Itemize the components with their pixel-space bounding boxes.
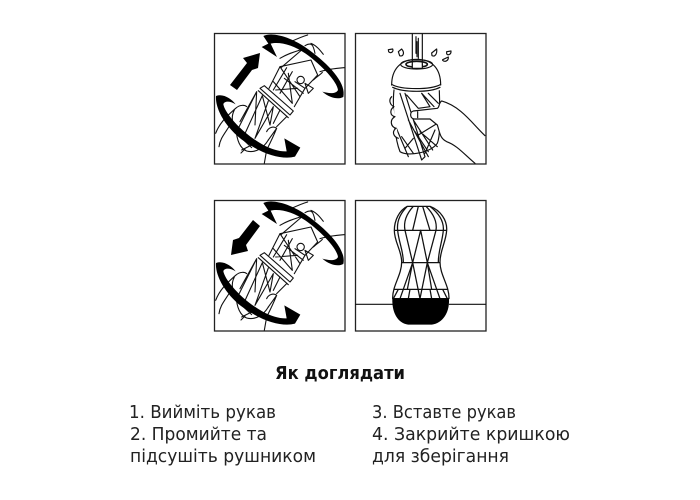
black cap: [392, 298, 449, 325]
text block: steps 3-4: 4. Закрийте кришкою: [372, 424, 570, 445]
water stream: [412, 34, 422, 66]
arrow: up-right: [230, 53, 260, 90]
text block: steps 3-4: 3. Вставте рукав: [372, 402, 516, 423]
panel: rinse under water: [356, 34, 486, 164]
text block: steps 3-4: [372, 402, 570, 467]
water drops: [388, 49, 451, 61]
left fingers: [390, 97, 398, 138]
text block: steps 1-2: підсушіть рушником: [130, 446, 316, 467]
cap: [392, 59, 441, 91]
title: Як доглядати: [275, 363, 405, 384]
panel: closed device with cap: [355, 200, 486, 331]
panel: twist and pull sleeve out: [214, 34, 345, 164]
hand: [411, 101, 485, 163]
panel: twist and push sleeve in: [214, 200, 345, 331]
sleeve cage: [393, 90, 440, 160]
text block: steps 1-2: 2. Промийте та: [130, 424, 267, 445]
arrow: down-left: [231, 220, 260, 255]
cage outline: [393, 206, 449, 299]
illustration: device under running water held by hand: [388, 34, 485, 163]
text block: steps 3-4: для зберігання: [372, 446, 509, 467]
illustration: hands twisting device with rotation arrows: [216, 34, 344, 163]
illustration: hands twisting device with rotation arrows: [216, 201, 344, 330]
text block: steps 1-2: 1. Вийміть рукав: [129, 402, 276, 423]
surface line: [355, 303, 486, 306]
text block: steps 1-2: [129, 402, 316, 467]
illustration: sleeve with black cap: [355, 206, 486, 325]
